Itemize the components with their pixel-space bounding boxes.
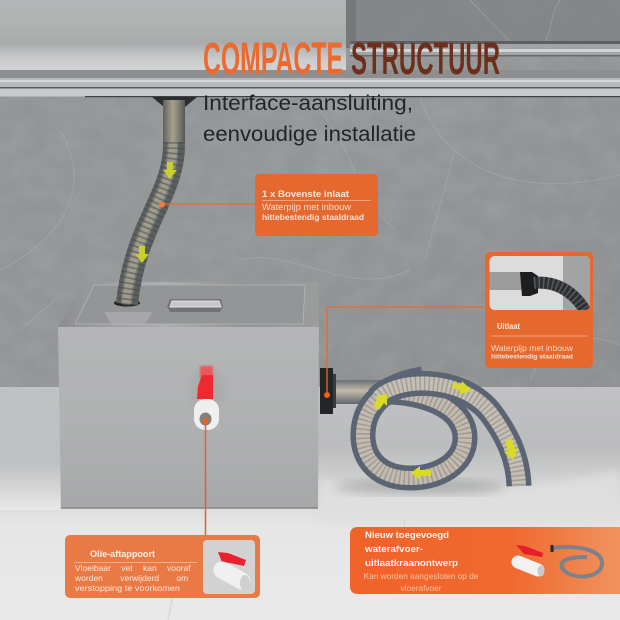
icon: ball valve — [516, 545, 544, 576]
hose arrows — [373, 381, 518, 480]
tank lid — [58, 282, 319, 327]
outlet coupling — [320, 368, 336, 414]
steel rails — [0, 41, 620, 97]
leader: drain port — [202, 418, 208, 535]
lower coil — [363, 379, 465, 478]
subtitle: eenvoudige installatie — [203, 122, 416, 146]
arrows on upper hose — [135, 162, 177, 263]
outlet hose coil — [335, 379, 519, 495]
callout: new drain valve design: Nieuw toegevoegd — [365, 530, 449, 540]
callout: outlet — [485, 252, 593, 368]
upper sweep — [378, 383, 519, 486]
callout: new drain valve design: uitlaatkraanontwerp — [365, 558, 458, 568]
straight outlet pipe — [335, 380, 390, 404]
upper inlet hose — [126, 97, 197, 304]
inlet opening — [114, 300, 140, 306]
outlet photo — [490, 256, 590, 312]
callout: new drain valve design: vloerafvoer — [400, 583, 442, 593]
leader: top inlet — [159, 202, 255, 208]
leader: outlet — [324, 307, 485, 398]
callout: new drain valve design — [350, 527, 620, 594]
countertop panel — [0, 0, 356, 74]
leader lines — [159, 202, 485, 535]
callout: new drain valve design: waterafvoer- — [364, 544, 423, 554]
callout: outlet: Uitlaat — [497, 322, 520, 331]
callout: top inlet: Waterpijp met inbouw — [262, 202, 352, 212]
drain valve on tank — [192, 366, 224, 430]
callout: top inlet: 1 x Bovenste inlaat — [262, 189, 350, 200]
floor — [0, 387, 620, 620]
callout: outlet: hittebestendig staaldraad — [491, 354, 573, 360]
callout: oil drain port — [65, 535, 260, 598]
callout: oil drain port: worden verwijderd om — [74, 573, 188, 583]
callout: top inlet: hittebestendig staaldraad — [262, 212, 364, 222]
icon: drain hose — [552, 545, 602, 576]
callout: top inlet — [255, 174, 378, 236]
marble wall background — [0, 0, 620, 392]
callout: oil drain port: Olie-aftappoort — [90, 549, 155, 559]
tank front face — [58, 327, 319, 508]
title: COMPACTE — [203, 33, 343, 84]
subtitle — [203, 91, 416, 146]
callout: outlet: Waterpijp met inbouw — [491, 343, 574, 353]
callout: new drain valve design: Kan worden aangesloten op de — [364, 571, 479, 581]
callout: oil drain port: Vloeibaar vet kan vooraf — [75, 563, 191, 573]
steel tank — [58, 282, 319, 508]
subtitle: Interface-aansluiting, — [203, 91, 413, 115]
drain valve photo — [203, 540, 255, 594]
floor shadow under hose — [335, 479, 505, 495]
callout: oil drain port: verstopping te voorkomen — [75, 583, 180, 593]
lid handle — [167, 299, 223, 312]
